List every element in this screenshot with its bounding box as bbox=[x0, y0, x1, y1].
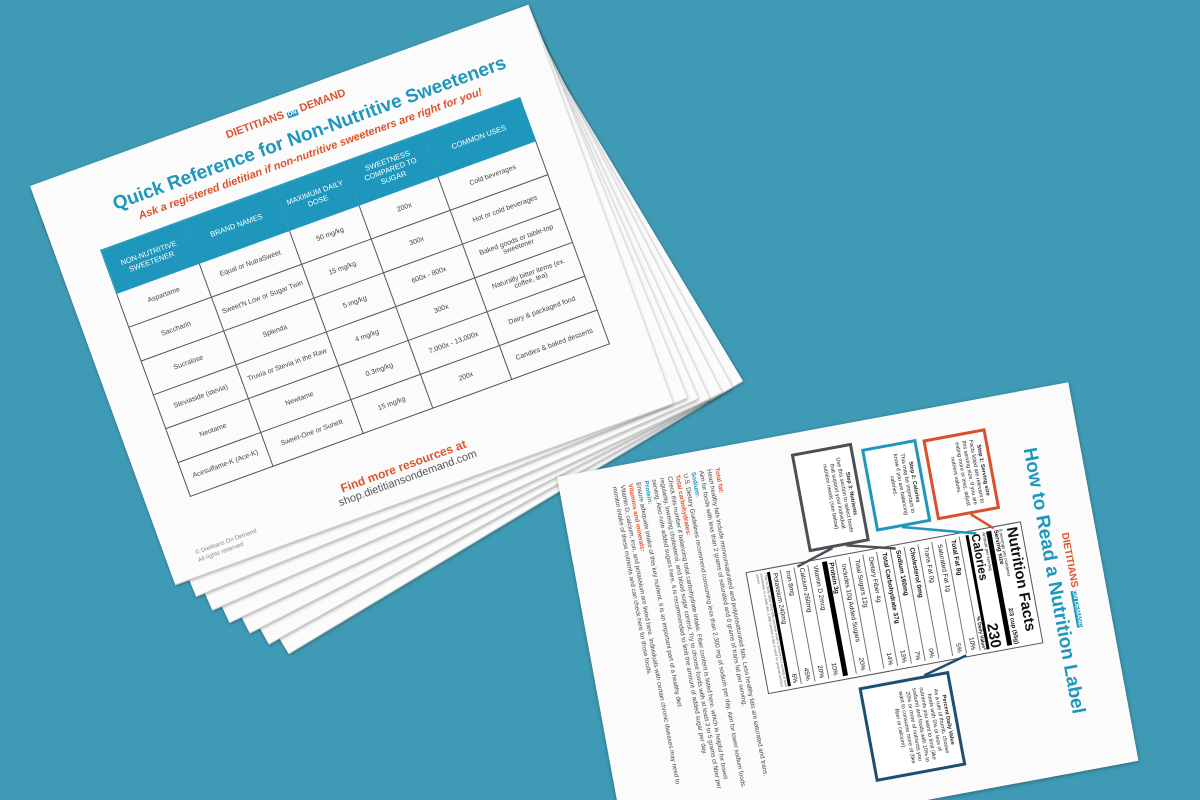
body text: Total fat: bbox=[713, 467, 725, 494]
table: Baked goods or table-top sweetener bbox=[478, 223, 554, 257]
nutrition facts label: Sodium 160mg bbox=[894, 550, 909, 596]
table: 300x bbox=[433, 303, 450, 315]
body text: Sodium: bbox=[689, 472, 701, 498]
nutrition facts label: 5% bbox=[954, 643, 963, 653]
table: Aspartame bbox=[147, 286, 181, 304]
nutrition facts label: 230 bbox=[983, 622, 1004, 649]
title: How to Read a Nutrition Label bbox=[1019, 446, 1089, 715]
table: Sweet-One or Sunett bbox=[280, 418, 344, 447]
callout: step 1 serving size bbox=[922, 428, 1000, 520]
nutrition facts label: 6% bbox=[790, 673, 799, 684]
panel: nutrition label sheet bbox=[557, 382, 1138, 800]
nutrition facts label: Total Sugars 12g bbox=[853, 559, 869, 608]
table: Candies & baked desserts bbox=[515, 327, 594, 362]
callout: percent daily value: Percent Daily Value bbox=[940, 694, 955, 745]
body text: Vitamin D, calcium, iron, and potassium are listed here. Individuals with certain chronic diseases may need to monitor intake of these nutrients and can check here for those foods. bbox=[611, 485, 681, 785]
footer: resources link: shop.dietitiansondemand.com bbox=[337, 448, 479, 509]
nutrition facts label: Vitamin D 2mcg bbox=[812, 565, 827, 611]
table: Newtame bbox=[285, 391, 315, 407]
table: Neotame bbox=[199, 422, 228, 439]
title: Quick Reference for Non-Nutritive Sweeteners bbox=[110, 53, 509, 215]
callout: step 2 calories: Step 2: Calories bbox=[907, 461, 921, 503]
table: 15 mg/kg bbox=[377, 396, 407, 412]
nutrition facts label: Calories bbox=[968, 532, 991, 582]
nutrition facts label: 20% bbox=[816, 665, 825, 679]
body text: Heart healthy fats include monounsaturated and polyunsaturated fats. Less healthy fats are saturated and trans. Aim for foods with less than 2 grams of saturated and 0 grams of trans fat per serving. bbox=[697, 469, 769, 777]
table: Splenda bbox=[262, 324, 288, 339]
subtitle: Ask a registered dietitian if non-nutritive sweeteners are right for you! bbox=[137, 86, 484, 222]
table: 600x - 800x bbox=[411, 266, 448, 285]
nutrition facts label: 13% bbox=[898, 649, 908, 663]
table: NON-NUTRITIVE SWEETENER bbox=[119, 238, 178, 273]
footer: resources link: Find more resources at bbox=[339, 437, 468, 495]
logo: DIETITIANS ON DEMAND bbox=[224, 87, 347, 141]
nutrition facts label: 7% bbox=[913, 650, 921, 661]
callout: step 2 calories bbox=[861, 439, 931, 532]
callout: step 1 serving size: Step 1: Serving size bbox=[975, 444, 991, 496]
table: Truvia or Stevia in the Raw bbox=[247, 348, 328, 383]
nutrition facts label: 2/3 cup (55g) bbox=[1007, 608, 1019, 645]
nutrition facts label: 20% bbox=[857, 657, 866, 671]
nutrition facts label: Total Fat 8g bbox=[949, 539, 963, 576]
table: Sweet'N Low or Sugar Twin bbox=[221, 280, 304, 316]
nutrition facts label bbox=[746, 521, 1043, 694]
table: Saccharin bbox=[160, 320, 192, 338]
table: 200x bbox=[458, 371, 474, 383]
logo: DIETITIANS ON DEMAND bbox=[1059, 532, 1083, 627]
nutrition facts label: 8 servings per container bbox=[998, 529, 1012, 577]
body text: U.S. Dietary Guidelines recommend consuming less than 2,300 mg of sodium per day. Aim for lower sodium foods. bbox=[682, 473, 747, 789]
table: 200x bbox=[396, 202, 413, 214]
body text: Protein: bbox=[642, 480, 653, 505]
callout: step 3 nutrients: Use this section to select foods that support your individual nutrition needs (see below). bbox=[821, 457, 854, 533]
nutrition facts label: Potassium 240mg bbox=[772, 572, 788, 625]
nutrition facts label: Total Carbohydrate 37g bbox=[880, 552, 900, 624]
nutrition facts label: % Daily Value* bbox=[975, 616, 987, 651]
nutrition facts label: Amount per serving bbox=[981, 532, 993, 571]
nutrition facts label: Dietary Fiber 4g bbox=[867, 556, 882, 603]
table: 0.3mg/kg bbox=[365, 362, 394, 378]
table: BRAND NAMES bbox=[209, 212, 264, 239]
nutrition facts label: Serving size bbox=[992, 530, 1004, 565]
table: 5 mg/kg bbox=[342, 295, 368, 310]
body text: Vitamins and minerals: bbox=[627, 483, 646, 552]
nutrition facts label: 0% bbox=[927, 648, 935, 658]
nutrition facts label: * The % Daily Value (DV) tells you how much a nutrient in a serving of food contributes to a daily diet. 2,000 calories a day is used for general nutrition advice. bbox=[755, 572, 788, 687]
callout: step 1 serving size: Facts listed are relevant to this serving size. If you are eating more or less, adjust nutrient values. bbox=[949, 439, 985, 506]
copyright: © Dietitians On Demand bbox=[195, 529, 258, 556]
callout: step 2 calories: This may be important to know if you are balancing calories. bbox=[888, 453, 915, 516]
callout: step 3 nutrients: Step 3: Nutrients bbox=[844, 472, 858, 516]
nutrition facts label: Saturated Fat 1g bbox=[936, 544, 951, 593]
nutrition facts label: Calcium 260mg bbox=[798, 567, 813, 613]
table: 4 mg/kg bbox=[354, 329, 380, 344]
copyright: All rights reserved bbox=[197, 542, 245, 564]
table: Cold beverages bbox=[469, 164, 517, 187]
body text: Total carbohydrates: bbox=[674, 474, 692, 537]
table: SWEETNESS COMPARED TO SUGAR bbox=[363, 148, 418, 186]
table: Acesulfame-K (Ace-K) bbox=[192, 449, 259, 480]
table: Naturally bitter items (ex. coffee, tea) bbox=[491, 257, 566, 290]
nutrition facts label: Includes 10g Added Sugars bbox=[840, 563, 861, 643]
table: Dairy & packaged food bbox=[508, 295, 577, 326]
nutrition facts label: 14% bbox=[885, 652, 894, 666]
table: Sucralose bbox=[173, 354, 204, 372]
nutrition facts label: Nutrition Facts bbox=[1003, 526, 1039, 633]
arrows bbox=[796, 514, 994, 676]
nutrition facts label: Cholesterol 0mg bbox=[908, 547, 924, 598]
table: 7,000x - 13,000x bbox=[428, 331, 479, 355]
table: 50 mg/kg bbox=[316, 227, 345, 243]
nutrition facts label: Trans Fat 0g bbox=[922, 546, 936, 583]
table bbox=[100, 97, 610, 497]
nutrition facts label: 45% bbox=[802, 667, 811, 681]
body text: Check this number if balancing total carbohydrate intake. Fiber content is listed here, which is helpful for bowel regularity, lowering cholesterol, and blood sugar control. Try to choose foods with at least 3 to 5 grams of fiber per serving. Also note added sugars here, it is recommended to limit the amount of added sugar per day. bbox=[650, 476, 729, 789]
stack of sheets bbox=[36, 4, 744, 656]
body text bbox=[611, 467, 769, 789]
nutrition facts label: Protein 3g bbox=[828, 562, 840, 594]
nutrition facts label: Iron 8mg bbox=[784, 570, 796, 596]
table: Hot or cold beverages bbox=[472, 194, 539, 224]
table: Steviaside (stevia) bbox=[173, 384, 229, 410]
nutrition facts label: 10% bbox=[967, 637, 976, 651]
nutrition facts label: 10% bbox=[830, 662, 839, 676]
table: Equal or NutraSweet bbox=[219, 249, 282, 278]
table: MAXIMUM DAILY DOSE bbox=[285, 178, 344, 208]
table: 15 mg/kg bbox=[328, 260, 357, 277]
panel: sweeteners quick reference sheet bbox=[30, 5, 673, 585]
body text: Ensure adequate intake of this key nutrient, it is an important part of a healthy diet. bbox=[634, 482, 683, 709]
table: 300x bbox=[408, 236, 425, 247]
callout: step 3 nutrients bbox=[791, 443, 870, 552]
callout: percent daily value: As a rule of thumb, choose foods with 5% or less of nutrients you want to limit (like sodium) and foods with 10% to 20% or more of nutrients you want to consume more of (like fiber or calcium). bbox=[893, 687, 950, 764]
table: COMMON USES bbox=[450, 123, 507, 151]
callout: percent daily value bbox=[858, 671, 966, 782]
